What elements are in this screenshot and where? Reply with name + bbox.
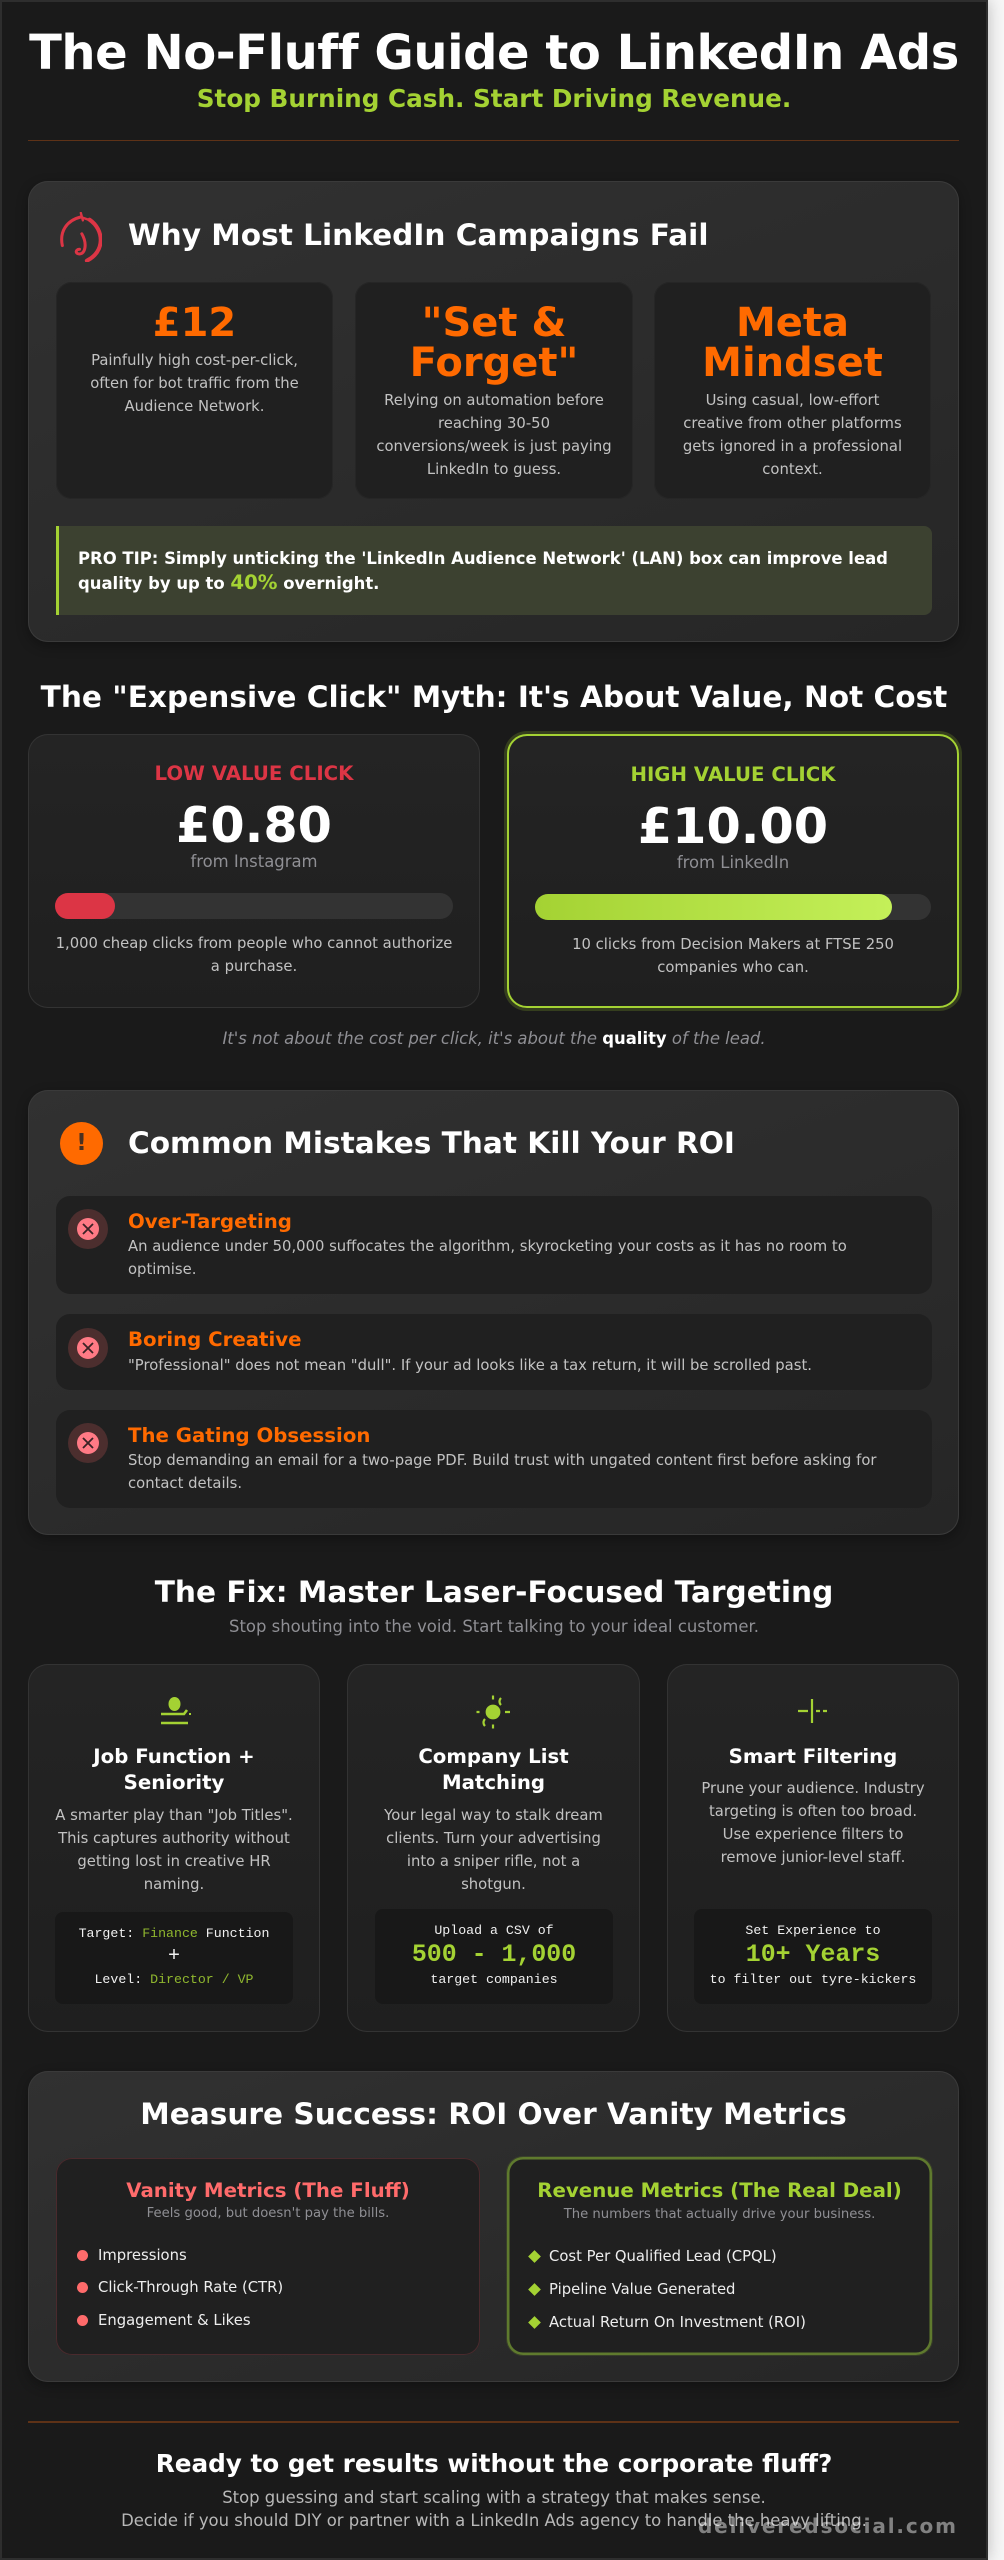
panel: smart filtering: Prune your audience. Industry	[701, 1780, 925, 1796]
panel: low value click: 1,000 cheap clicks from people who cannot authorize	[56, 935, 452, 952]
card: set and forget: Relying on automation before	[384, 392, 604, 409]
call to action text: Decide if you should DIY or partner with a LinkedIn Ads agency to handle the heavy lifting.	[121, 2511, 867, 2530]
card: set and forget: Forget"	[410, 340, 578, 386]
card: set and forget	[355, 282, 633, 499]
panel: company list: Company List	[418, 1745, 569, 1768]
caption: quality: It's not about the cost per click, it's about the quality of the lead.	[222, 1029, 766, 1048]
item: gating obsession: The Gating Obsession	[128, 1424, 370, 1447]
panel: smart filtering	[667, 1664, 959, 2032]
card: £12	[56, 282, 333, 499]
call to action text	[121, 2488, 867, 2530]
panel: low value click	[28, 734, 480, 1008]
panel: high value click: 10 clicks from Decision Makers at FTSE 250	[572, 936, 894, 952]
panel: smart filtering: Use experience filters to	[723, 1826, 903, 1842]
icon: crosshair	[798, 1699, 827, 1723]
card: £12: Painfully high cost-per-click,	[91, 352, 298, 369]
panel: high value click: companies who can.	[657, 958, 809, 976]
list: revenue	[528, 2248, 806, 2331]
targeting box: +	[168, 1945, 180, 1968]
call to action heading: Ready to get results without the corporate fluff?	[156, 2449, 832, 2478]
footer divider	[28, 2421, 959, 2423]
panel: job function: A smarter play than "Job Titles".	[55, 1806, 293, 1824]
panel: measure success	[28, 2071, 959, 2382]
card: vanity metrics	[56, 2158, 480, 2355]
icon: warning	[60, 1122, 103, 1165]
panel: company list: into a sniper rifle, not a	[407, 1852, 580, 1870]
list: revenue: Cost Per Qualified Lead (CPQL)	[549, 2248, 777, 2265]
item: boring creative	[56, 1314, 932, 1390]
card: £12: Audience Network.	[125, 398, 264, 415]
panel: high value click: £10.00	[638, 796, 828, 854]
card: revenue metrics	[507, 2157, 932, 2355]
heading: Measure Success: ROI Over Vanity Metrics	[140, 2097, 847, 2131]
item: over-targeting	[56, 1196, 932, 1294]
card: meta mindset: Mindset	[702, 340, 883, 386]
card: set and forget: reaching 30-50	[438, 415, 550, 432]
experience box: 10+ Years	[746, 1941, 880, 1969]
panel: why campaigns fail	[28, 181, 959, 642]
list: vanity: Click-Through Rate (CTR)	[98, 2279, 283, 2296]
list: revenue: Actual Return On Investment (ROI)	[549, 2314, 806, 2331]
item: over-targeting: optimise.	[128, 1261, 196, 1278]
title: The No-Fluff Guide to LinkedIn Ads	[29, 25, 959, 81]
csv box: 500 - 1,000	[412, 1941, 576, 1969]
panel: high value click	[507, 734, 959, 1008]
targeting box	[55, 1912, 293, 2004]
item: boring creative: "Professional" does not mean "dull". If your ad looks like a tax return, it will be scrolled past.	[128, 1357, 812, 1374]
heading: Why Most LinkedIn Campaigns Fail	[128, 218, 708, 252]
panel: job function: Seniority	[124, 1771, 224, 1794]
card: meta mindset: context.	[762, 461, 823, 478]
targeting box: Level: Director / VP	[94, 1972, 254, 1987]
card: meta mindset: Meta	[736, 300, 849, 346]
panel: low value click: from Instagram	[190, 852, 318, 871]
item: over-targeting: Over-Targeting	[128, 1210, 292, 1233]
card: revenue metrics: Revenue Metrics (The Real Deal)	[537, 2179, 902, 2202]
panel: company list	[347, 1664, 640, 2032]
list: vanity: Engagement & Likes	[98, 2312, 251, 2329]
item: gating obsession	[56, 1410, 932, 1508]
experience box: Set Experience to	[745, 1923, 881, 1938]
callout: pro tip: PRO TIP: Simply unticking the 'LinkedIn Audience Network' (LAN) box can improve lead	[78, 549, 888, 568]
icon: fishing hook	[60, 212, 102, 262]
callout: pro tip: quality by up to 40% overnight.	[78, 571, 379, 594]
list: revenue: Pipeline Value Generated	[549, 2281, 735, 2298]
panel: high value click: from LinkedIn	[677, 852, 789, 872]
card: vanity metrics: Vanity Metrics (The Fluff)	[126, 2179, 410, 2202]
experience box	[694, 1909, 932, 2004]
bar: low	[55, 893, 453, 919]
panel: low value click: a purchase.	[211, 958, 297, 975]
panel: low value click: £0.80	[176, 796, 332, 854]
targeting box: Target: Finance Function	[79, 1926, 269, 1941]
csv box	[375, 1909, 613, 2004]
panel: company list: clients. Turn your advertising	[386, 1830, 601, 1846]
panel: low value click: LOW VALUE CLICK	[155, 762, 353, 785]
heading: expensive click myth: The "Expensive Click" Myth: It's About Value, Not Cost	[41, 680, 947, 714]
item: over-targeting: An audience under 50,000 suffocates the algorithm, skyrocketing your costs as it has no room to	[128, 1238, 847, 1255]
card: vanity metrics: Feels good, but doesn't pay the bills.	[147, 2206, 389, 2221]
card: set and forget: "Set &	[422, 300, 566, 346]
card: meta mindset	[654, 282, 931, 499]
callout: pro tip	[56, 526, 932, 615]
panel: smart filtering: Smart Filtering	[729, 1745, 897, 1768]
panel: company list: shotgun.	[461, 1876, 526, 1892]
card: £12: £12	[153, 300, 236, 346]
panel: smart filtering: targeting is often too broad.	[709, 1802, 917, 1820]
card: revenue metrics: The numbers that actually drive your business.	[564, 2207, 875, 2222]
call to action text: Stop guessing and start scaling with a strategy that makes sense.	[222, 2488, 766, 2507]
item: gating obsession: contact details.	[128, 1475, 242, 1492]
panel: job function: This captures authority without	[58, 1830, 290, 1846]
card: set and forget: LinkedIn to guess.	[427, 461, 561, 478]
icon: target	[476, 1696, 510, 1728]
panel: company list: Your legal way to stalk dream	[384, 1806, 603, 1824]
card: £12: often for bot traffic from the	[90, 375, 299, 392]
card: set and forget: conversions/week is just paying	[376, 438, 612, 455]
list: vanity: Impressions	[98, 2247, 187, 2264]
item: gating obsession: Stop demanding an email for a two-page PDF. Build trust with ungated content first before asking for	[128, 1452, 876, 1469]
panel: job function: Job Function +	[93, 1745, 255, 1768]
card: meta mindset: creative from other platforms	[683, 415, 902, 432]
panel: job function: naming.	[144, 1876, 204, 1892]
heading: Common Mistakes That Kill Your ROI	[128, 1126, 735, 1160]
csv box: Upload a CSV of	[434, 1923, 554, 1938]
icon: warning: !	[76, 1130, 87, 1156]
card: meta mindset: gets ignored in a professional	[683, 438, 902, 455]
header divider	[28, 140, 959, 141]
panel: high value click: HIGH VALUE CLICK	[630, 762, 836, 786]
panel: company list: Matching	[442, 1771, 545, 1794]
watermark: deliveredsocial.com	[698, 2514, 958, 2538]
icon: person	[161, 1697, 191, 1724]
subheading: the fix: Stop shouting into the void. Start talking to your ideal customer.	[229, 1617, 759, 1636]
card: meta mindset: Using casual, low-effort	[706, 392, 879, 409]
list: vanity	[77, 2247, 283, 2329]
panel: smart filtering: remove junior-level staff.	[721, 1848, 905, 1866]
bar: high	[534, 894, 930, 920]
heading: the fix: The Fix: Master Laser-Focused Targeting	[155, 1575, 833, 1609]
item: boring creative: Boring Creative	[128, 1328, 302, 1351]
subtitle: Stop Burning Cash. Start Driving Revenue.	[197, 84, 791, 113]
experience box: to filter out tyre-kickers	[710, 1972, 916, 1987]
csv box: target companies	[430, 1972, 558, 1987]
panel: common mistakes	[28, 1090, 959, 1535]
panel: job function	[28, 1664, 320, 2032]
panel: job function: getting lost in creative HR	[77, 1852, 271, 1870]
